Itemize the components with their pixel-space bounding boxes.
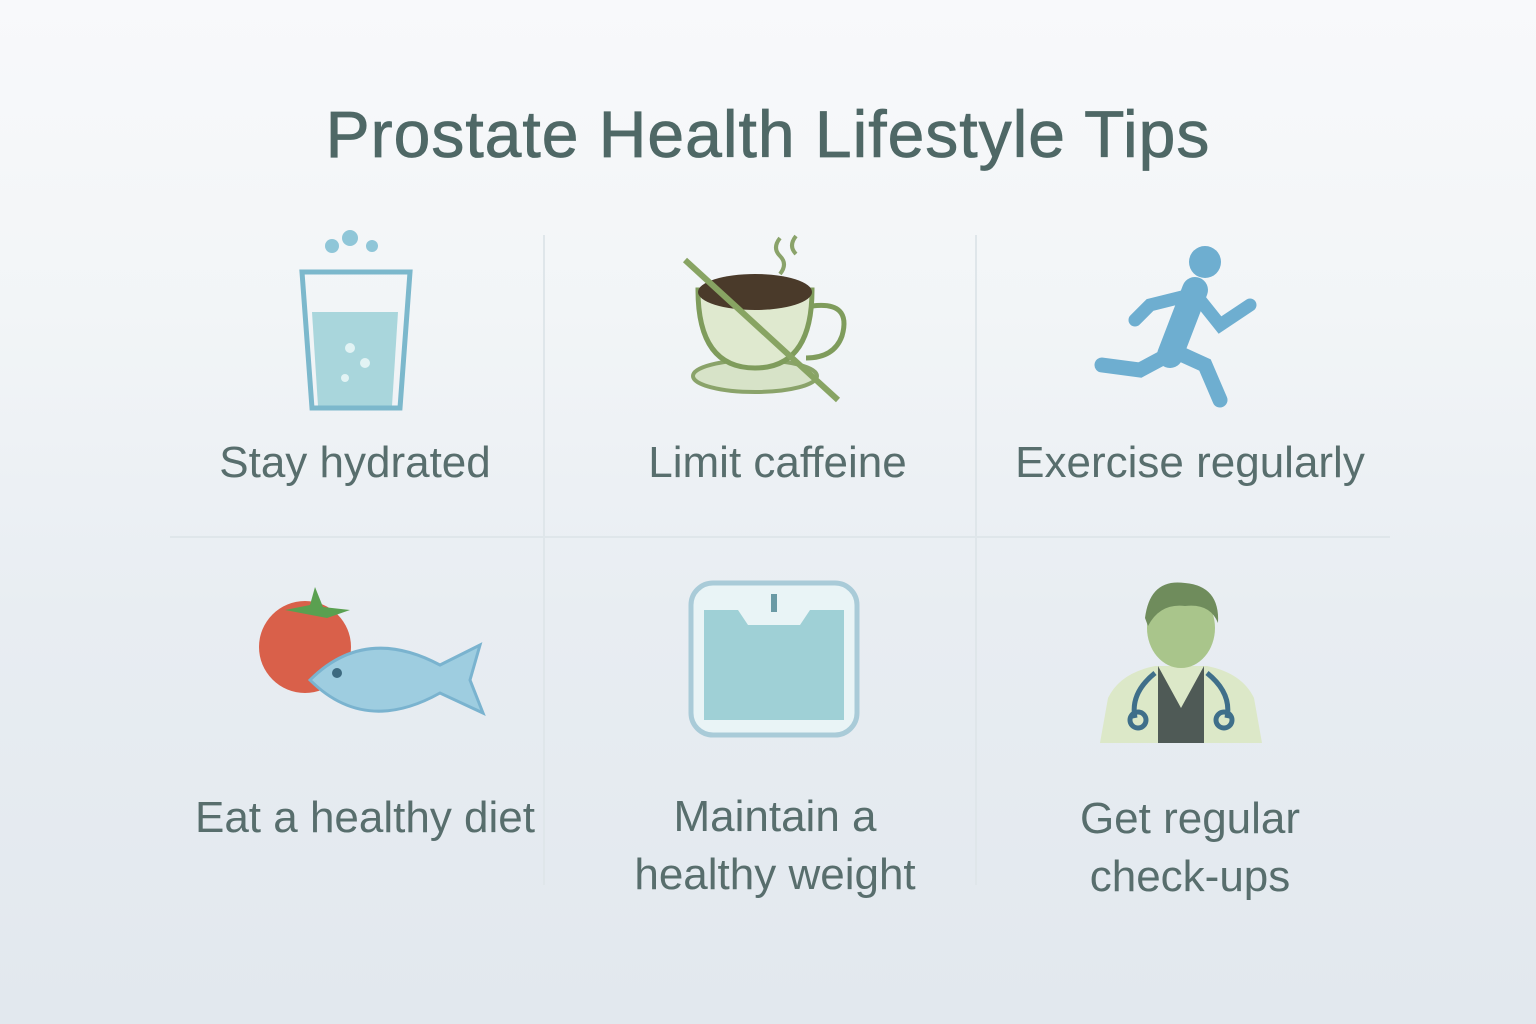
- icon: runner: [1094, 246, 1256, 408]
- label: limit caffeine: Limit caffeine: [648, 438, 907, 487]
- label: eat a healthy diet: Eat a healthy diet: [195, 793, 535, 842]
- label: get regular check-ups: Get regular: [1080, 794, 1300, 843]
- label: get regular check-ups: check-ups: [1090, 852, 1290, 901]
- icon: coffee cup crossed: [683, 234, 846, 402]
- icon: doctor: [1100, 582, 1262, 743]
- label: exercise regularly: Exercise regularly: [1015, 438, 1365, 487]
- icon: scale: [688, 580, 860, 738]
- label: maintain a healthy weight: healthy weight: [634, 850, 916, 899]
- icon: glass of water: [299, 230, 413, 410]
- label: stay hydrated: Stay hydrated: [219, 438, 491, 487]
- title: Prostate Health Lifestyle Tips: [326, 97, 1210, 171]
- label: get regular check-ups: [1080, 794, 1300, 901]
- icon: tomato and fish: [259, 587, 486, 716]
- label: maintain a healthy weight: [634, 792, 916, 899]
- label: maintain a healthy weight: Maintain a: [673, 792, 876, 841]
